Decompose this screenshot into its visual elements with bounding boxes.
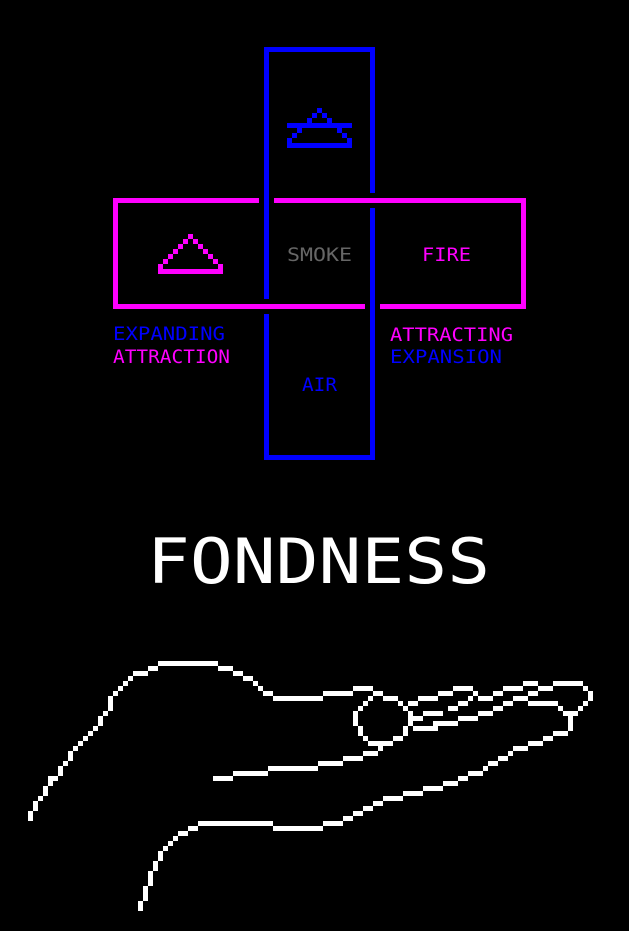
illustration: open hand holding a small circle [28,661,593,911]
caption: expanding attraction: EXPANDING [113,323,225,345]
horizontal magenta box [113,198,526,309]
caption: expanding attraction: ATTRACTION [113,346,230,368]
caption: attracting expansion [390,324,513,368]
label: fire: FIRE [422,244,471,266]
diagram: interlaced cross [113,47,526,460]
title: FONDNESS [147,525,490,598]
caption: expanding attraction [113,323,230,368]
icon: magenta triangle [158,234,223,274]
caption: attracting expansion: EXPANSION [390,346,502,368]
vertical blue box [264,47,375,460]
icon: blue crossed triangle [287,108,352,148]
label: air: AIR [302,374,338,396]
caption: attracting expansion: ATTRACTING [390,324,513,346]
label: smoke: SMOKE [287,244,352,266]
